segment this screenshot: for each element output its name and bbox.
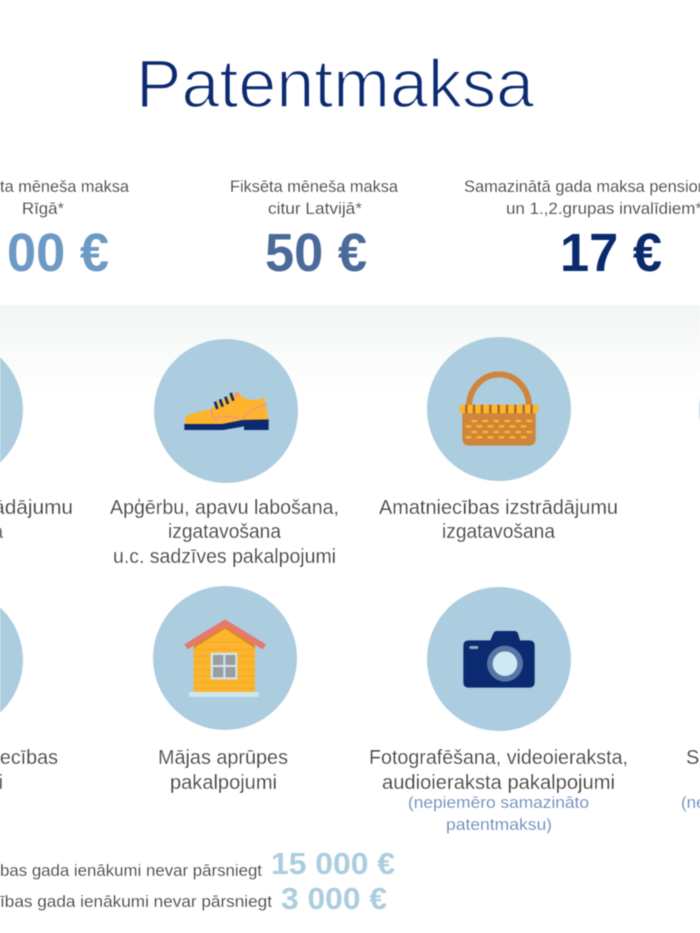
label: crafts left (0, 497, 73, 543)
income limit 15 000: 15 000 € (271, 846, 395, 881)
label: clothing and shoe repair: izgatavošana (168, 521, 282, 543)
price block: reduced fee: un 1.,2.grupas invalīdiem* (506, 199, 700, 218)
price block: Riga: 00 € (7, 223, 109, 283)
label: home care: pakalpojumi (170, 772, 277, 794)
income limit 3 000: ības gada ienākumi nevar pārsniegt (0, 892, 272, 911)
label: photography: patentmaksu) (446, 815, 552, 834)
label: crafts: izgatavošana (442, 521, 556, 543)
icon: clipped circle row 1 right (699, 338, 700, 482)
price block: reduced fee: 17 € (560, 223, 662, 283)
label: left service row 2 (0, 747, 58, 794)
icon: shoe (154, 339, 298, 483)
icon: clipped circle row 2 left (0, 588, 23, 732)
label: home care (158, 747, 288, 794)
label: photography: audioieraksta pakalpojumi (382, 772, 615, 794)
price block: elsewhere in Latvia (230, 177, 399, 283)
label: right service row 2 (681, 747, 700, 812)
price block: Riga: Rīgā* (22, 199, 64, 218)
label: photography: Fotografēšana, videoieraksta, (369, 747, 628, 769)
title: Patentmaksa (136, 46, 534, 122)
label: home care: Mājas aprūpes (158, 747, 288, 769)
label: clothing and shoe repair: u.c. sadzīves pakalpojumi (113, 546, 336, 568)
icon: camera (427, 587, 571, 731)
label: crafts: Amatniecības izstrādājumu (379, 497, 618, 519)
price block: elsewhere in Latvia: 50 € (265, 223, 367, 283)
income limit 15 000 (0, 846, 395, 881)
icon: house (153, 586, 297, 730)
icon: basket (427, 337, 571, 481)
price block: elsewhere in Latvia: citur Latvijā* (268, 199, 362, 218)
income limit 3 000 (0, 881, 387, 916)
icon: clipped circle row 1 left (0, 338, 23, 482)
price block: Riga (0, 177, 130, 283)
price block: reduced fee (464, 177, 700, 283)
label: crafts (379, 497, 618, 543)
income limit 3 000: 3 000 € (281, 881, 387, 916)
label: photography: (nepiemēro samazināto (408, 793, 589, 812)
label: clothing and shoe repair (110, 497, 339, 568)
income limit 15 000: bas gada ienākumi nevar pārsniegt (0, 861, 262, 880)
label: clothing and shoe repair: Apģērbu, apavu labošana, (110, 497, 339, 519)
label: photography (369, 747, 628, 834)
price block: elsewhere in Latvia: Fiksēta mēneša maksa (230, 177, 399, 196)
